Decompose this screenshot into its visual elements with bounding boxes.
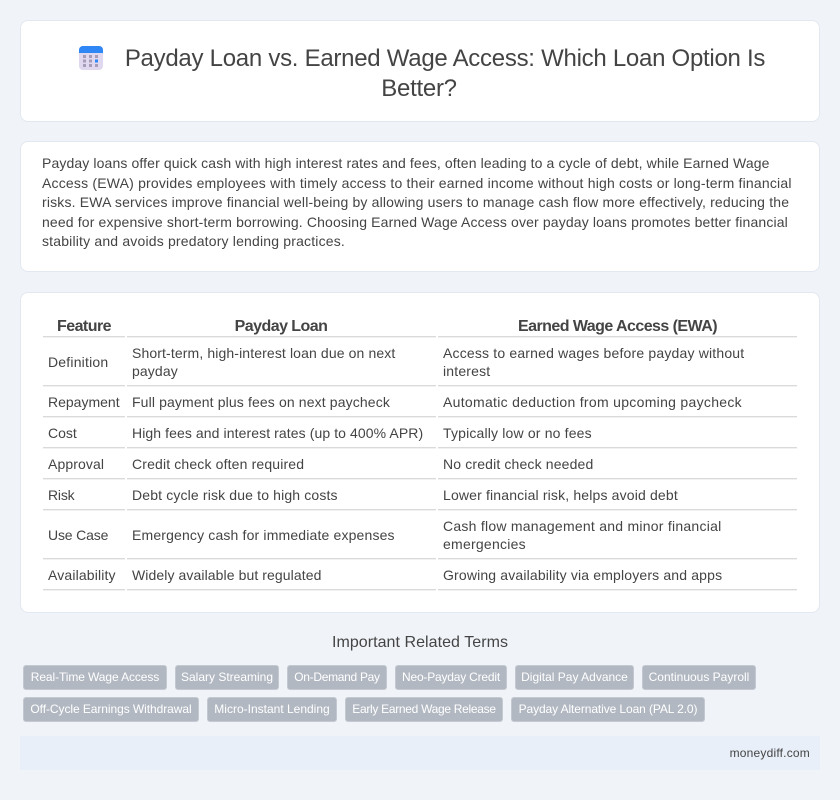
- tag: Micro-Instant Lending: [214, 702, 330, 716]
- intro text: stability and avoids predatory lending practices.: [42, 233, 345, 249]
- tag: [345, 697, 503, 722]
- row: availability: [48, 567, 722, 583]
- row: cost: [48, 425, 592, 441]
- intro text: Access (EWA) provides employees with timely access to their earned income without high costs or long-term financial: [42, 175, 792, 191]
- row: use case: Emergency cash for immediate expenses: [132, 527, 395, 543]
- tag: [642, 665, 756, 690]
- tag: Payday Alternative Loan (PAL 2.0): [519, 702, 697, 716]
- tag: Continuous Payroll: [649, 670, 749, 684]
- tag: [511, 697, 705, 722]
- tag: Neo-Payday Credit: [402, 670, 500, 684]
- panel: comparison table: [20, 292, 820, 613]
- row: use case: Use Case: [48, 527, 108, 543]
- row: approval: Credit check often required: [132, 456, 304, 472]
- intro text: [42, 155, 792, 249]
- tag: Digital Pay Advance: [521, 670, 628, 684]
- tag: [23, 697, 199, 722]
- title: Better?: [381, 75, 457, 102]
- row: use case: [48, 518, 721, 552]
- tag: [23, 665, 167, 690]
- table header: [57, 318, 717, 335]
- table header: Earned Wage Access (EWA): [518, 318, 717, 335]
- intro text: need for expensive short-term borrowing. Choosing Earned Wage Access over payday loans promotes better financial: [42, 214, 788, 230]
- row: risk: [48, 487, 678, 503]
- title: Payday Loan vs. Earned Wage Access: Which Loan Option Is: [125, 45, 765, 72]
- intro text: Payday loans offer quick cash with high interest rates and fees, often leading to a cycle of debt, while Earned Wage: [42, 155, 770, 171]
- panel: related term tags: [23, 665, 756, 722]
- tag: Early Earned Wage Release: [352, 702, 496, 716]
- tag: Salary Streaming: [181, 670, 273, 684]
- row: approval: No credit check needed: [443, 456, 593, 472]
- heading: related terms: Important Related Terms: [332, 634, 508, 651]
- row: definition: [48, 345, 744, 379]
- tag: Real-Time Wage Access: [31, 670, 159, 684]
- title: [125, 45, 765, 102]
- row: availability: Widely available but regulated: [132, 567, 321, 583]
- row: definition: Access to earned wages before payday without: [443, 345, 744, 361]
- tag: [515, 665, 634, 690]
- table header: Feature: [57, 318, 111, 335]
- tag: Off-Cycle Earnings Withdrawal: [30, 702, 192, 716]
- row: definition: Short-term, high-interest loan due on next: [132, 345, 395, 361]
- panel: introduction: [20, 141, 820, 272]
- row: definition: payday: [132, 363, 178, 379]
- row: definition: interest: [443, 363, 490, 379]
- panel: title card: [20, 20, 820, 122]
- row: availability: Availability: [48, 567, 116, 583]
- row: use case: Cash flow management and minor financial: [443, 518, 721, 534]
- intro text: risks. EWA services improve financial well-being by allowing users to manage cash flow more effectively, reducing the: [42, 194, 789, 210]
- row: cost: Cost: [48, 425, 77, 441]
- tag: [395, 665, 507, 690]
- icon: calendar: [79, 46, 103, 70]
- tag: On-Demand Pay: [294, 670, 380, 684]
- tag: [287, 665, 387, 690]
- table header: Payday Loan: [235, 318, 327, 335]
- row: approval: Approval: [48, 456, 104, 472]
- row: risk: Debt cycle risk due to high costs: [132, 487, 338, 503]
- row: availability: Growing availability via employers and apps: [443, 567, 722, 583]
- footer: [20, 736, 820, 770]
- row: repayment: Repayment: [48, 394, 120, 410]
- row: cost: High fees and interest rates (up to 400% APR): [132, 425, 423, 441]
- row: repayment: [48, 394, 742, 410]
- source credit: moneydiff.com: [730, 746, 810, 760]
- tag: [207, 697, 337, 722]
- row: approval: [48, 456, 593, 472]
- row: definition: Definition: [48, 354, 108, 370]
- row: repayment: Full payment plus fees on next paycheck: [132, 394, 390, 410]
- row: risk: Risk: [48, 487, 74, 503]
- row: risk: Lower financial risk, helps avoid debt: [443, 487, 678, 503]
- row: cost: Typically low or no fees: [443, 425, 592, 441]
- tag: [175, 665, 279, 690]
- row: repayment: Automatic deduction from upcoming paycheck: [443, 394, 742, 410]
- row: use case: emergencies: [443, 536, 526, 552]
